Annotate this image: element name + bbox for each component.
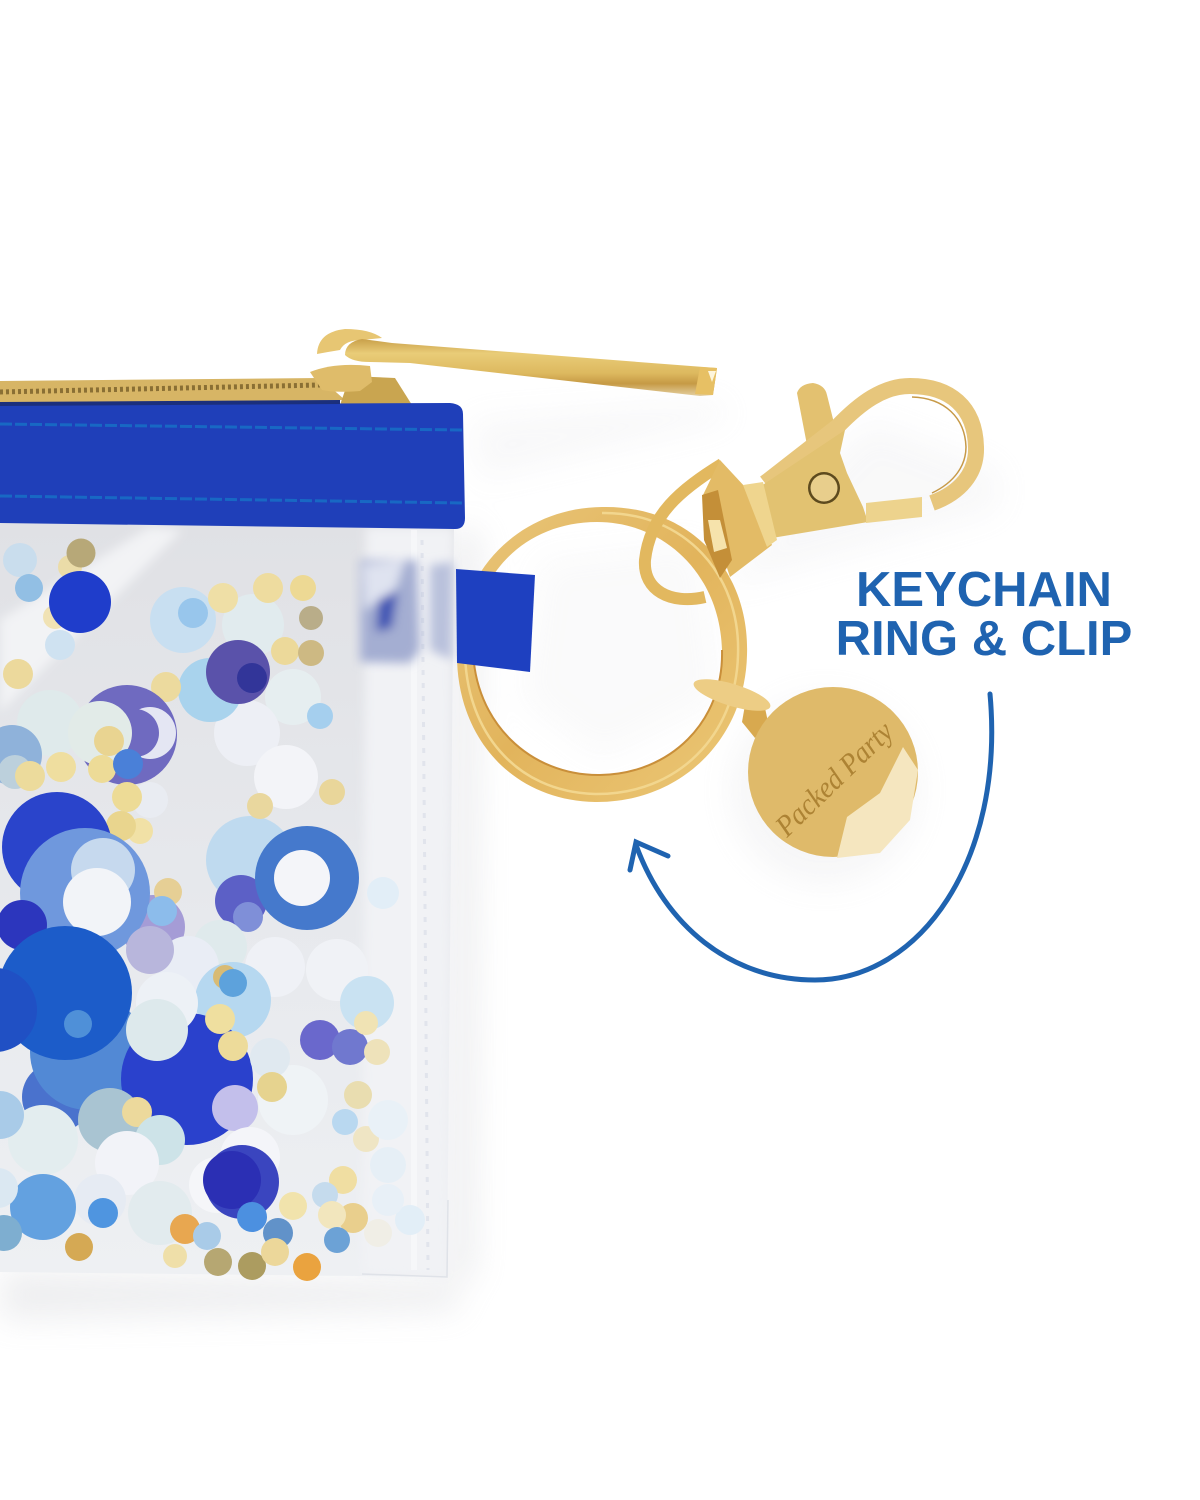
clip gate	[866, 497, 922, 523]
thumb lever	[797, 383, 834, 445]
hook and body	[765, 386, 976, 503]
clip rivet	[808, 472, 840, 504]
key ring	[457, 507, 747, 802]
label: keychain ring and clip: RING & CLIP	[836, 612, 1132, 666]
blue fabric binding	[0, 402, 465, 529]
label: keychain ring and clip: KEYCHAIN	[856, 563, 1112, 617]
jump ring and charm	[691, 673, 918, 858]
confetti	[0, 538, 425, 1281]
charm script logo: Packed Party	[768, 715, 900, 844]
zipper slider and pull tab	[310, 329, 717, 396]
label: keychain ring and clip	[836, 563, 1132, 666]
zipper tape	[0, 376, 412, 408]
soft drop shadows	[0, 400, 1000, 1320]
lobster clip	[645, 383, 976, 599]
curved arrow	[630, 694, 992, 980]
swivel collar	[743, 482, 777, 547]
swivel wire loop	[645, 464, 722, 599]
vinyl seam reflection patch	[360, 560, 453, 663]
blue fabric loop tab	[456, 569, 535, 672]
swivel barrel	[703, 460, 772, 577]
clear vinyl pouch body	[0, 522, 454, 1277]
